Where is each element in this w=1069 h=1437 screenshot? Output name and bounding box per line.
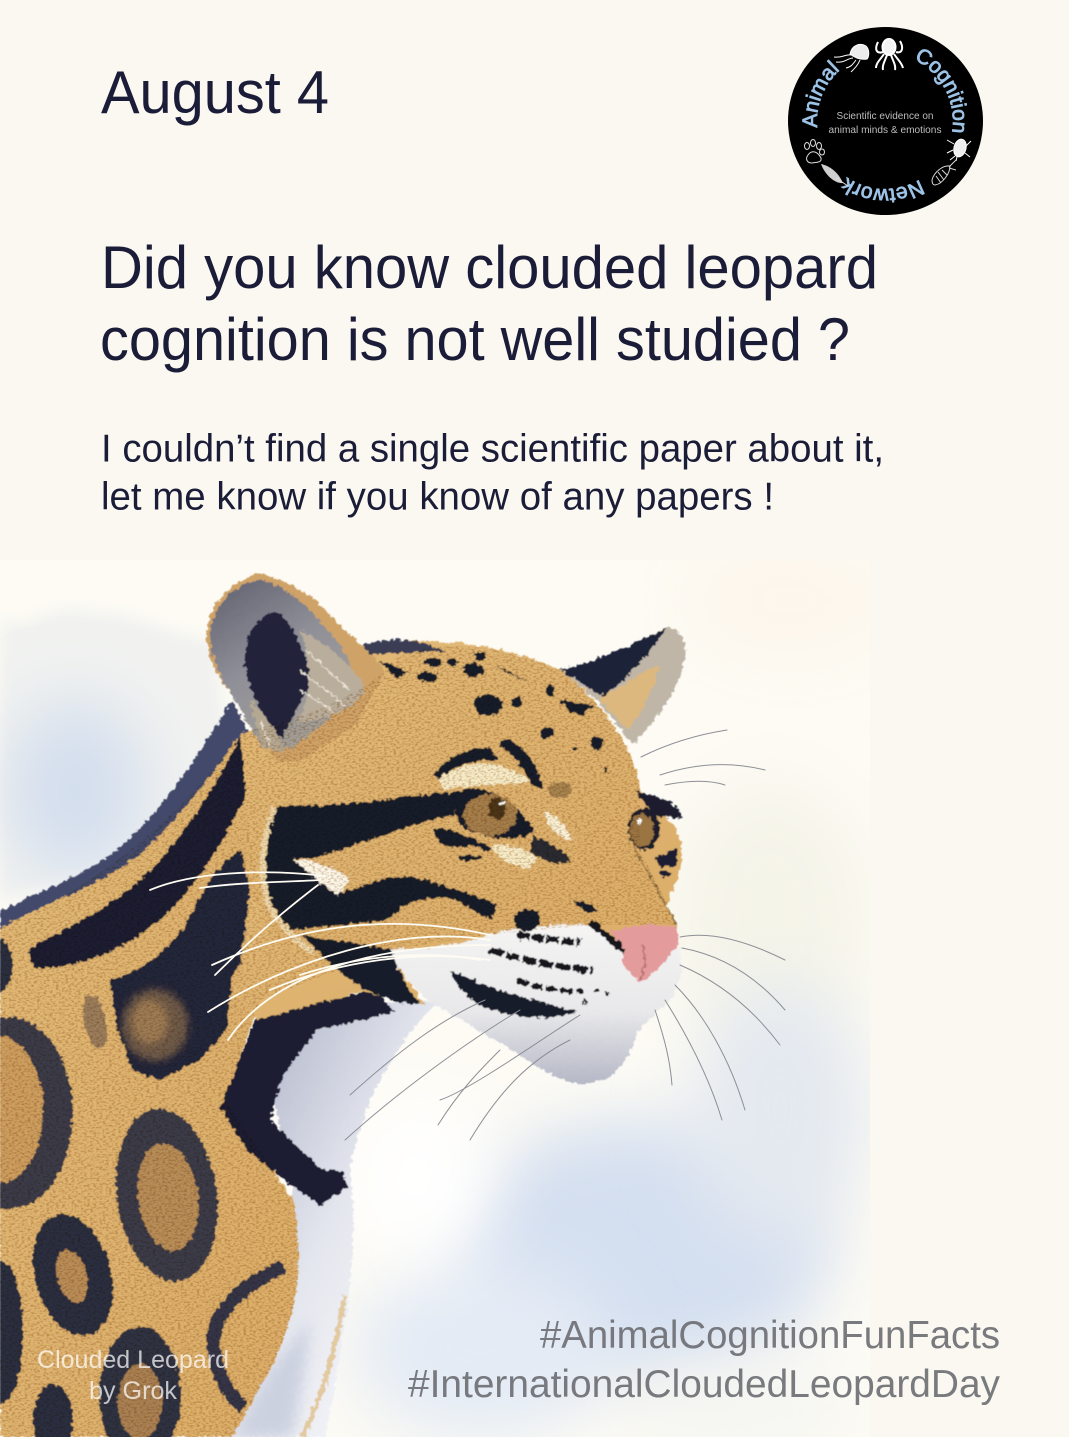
cream arc behind cheek <box>263 808 314 953</box>
logo tagline <box>828 111 942 136</box>
body text: I couldn’t find a single scientific paper about it, <box>101 428 884 470</box>
blue-grey lower chest shade <box>232 1320 310 1437</box>
hashtags: #InternationalCloudedLeopardDay <box>408 1363 1000 1406</box>
body text: let me know if you know of any papers ! <box>101 476 774 518</box>
leopard figure <box>0 574 686 1437</box>
logo ring text: Animal Cognition Network <box>802 49 968 203</box>
fur grain <box>0 646 678 1437</box>
eye mask stripes <box>263 792 496 930</box>
back edge <box>0 700 262 950</box>
whiskers <box>150 730 785 1140</box>
icon: jellyfish <box>834 45 869 72</box>
main heading: cognition is not well studied ? <box>100 306 850 373</box>
body text <box>101 428 884 518</box>
logo tagline: Scientific evidence on <box>836 111 934 122</box>
hashtags <box>408 1314 1000 1406</box>
image credit: by Grok <box>89 1377 177 1405</box>
logo: Animal Cognition Network <box>788 27 983 215</box>
lower cheek fur band <box>236 890 487 1020</box>
head spots <box>378 652 608 772</box>
icon: fish <box>932 160 956 185</box>
shoulder patch <box>110 850 262 1080</box>
main eye <box>447 789 535 838</box>
muzzle and chin <box>387 902 682 1083</box>
faded spot <box>79 993 111 1051</box>
main heading: Did you know clouded leopard <box>101 234 878 301</box>
coat rosettes <box>0 939 283 1437</box>
collar black <box>220 990 395 1206</box>
watercolor background <box>0 540 900 1437</box>
gold rim by chest <box>302 1295 345 1437</box>
body fur <box>0 735 300 1437</box>
main heading <box>100 234 878 373</box>
image credit <box>37 1346 229 1405</box>
logo tagline: animal minds & emotions <box>828 125 942 136</box>
under-cheek black <box>303 935 420 1004</box>
brow markings <box>433 738 677 925</box>
icon: paw <box>804 140 824 163</box>
white cheek patch <box>293 860 350 896</box>
far eye region <box>628 792 682 877</box>
image credit: Clouded Leopard <box>37 1346 229 1374</box>
icon: beetle <box>947 138 971 161</box>
neck stripe <box>27 735 262 968</box>
date heading: August 4 <box>101 59 329 126</box>
icon: octopus <box>876 39 903 70</box>
head top dark line <box>362 640 445 655</box>
right ear <box>560 627 686 745</box>
icon: feather <box>821 164 848 186</box>
head fur <box>240 641 682 990</box>
illustration panel: clouded leopard watercolor <box>0 540 900 1437</box>
nose <box>590 922 679 982</box>
left ear <box>207 574 385 762</box>
white chest <box>225 1000 440 1437</box>
hashtags: #AnimalCognitionFunFacts <box>540 1314 1000 1357</box>
